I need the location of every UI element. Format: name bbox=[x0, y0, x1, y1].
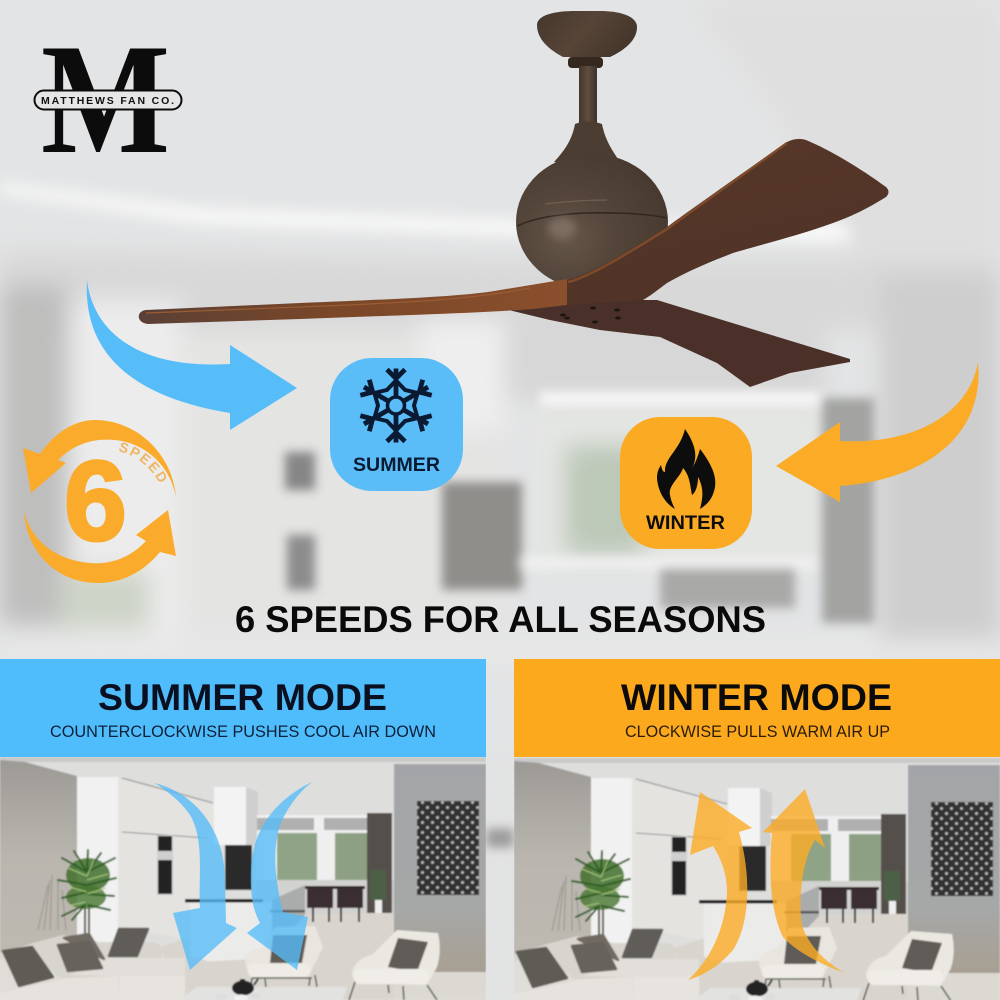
text: winter mode description: CLOCKWISE PULLS WARM AIR UP bbox=[625, 722, 890, 741]
icon: six speed arrows: 6 bbox=[64, 438, 127, 564]
ceiling fan bbox=[139, 11, 889, 387]
icon: six speed arrows: SPEED bbox=[119, 442, 166, 482]
text: summer mode description: COUNTERCLOCKWISE PUSHES COOL AIR DOWN bbox=[50, 722, 436, 741]
fan canopy and downrod bbox=[537, 11, 637, 124]
arrow: cool air right bbox=[247, 782, 312, 970]
icon: six speed arrows bbox=[23, 380, 214, 583]
title: 6 SPEEDS FOR ALL SEASONS bbox=[235, 599, 766, 640]
arrow: warm air right bbox=[763, 789, 845, 973]
label: winter: WINTER bbox=[646, 513, 725, 534]
panel: summer room with downward airflow bbox=[0, 757, 486, 1000]
heading: summer mode: SUMMER MODE bbox=[98, 677, 387, 718]
arrow: cool air left bbox=[155, 783, 237, 970]
label: summer: SUMMER bbox=[353, 455, 440, 476]
logo: Matthews Fan Co.: M bbox=[41, 12, 170, 187]
badge: summer bbox=[330, 358, 463, 491]
fan hub screws bbox=[560, 306, 621, 324]
fan blade: upper right bbox=[567, 139, 888, 305]
arrow: winter airflow bbox=[776, 362, 979, 502]
icon: flame bbox=[657, 429, 715, 509]
panel: winter room with upward airflow bbox=[514, 758, 1000, 1000]
fan blade edge highlight bbox=[568, 143, 787, 282]
arrow: summer airflow bbox=[87, 280, 297, 430]
fan blade: long left bbox=[139, 279, 567, 324]
icon: snowflake bbox=[359, 368, 433, 442]
panel: winter mode header bbox=[514, 659, 1000, 757]
fan blade: bottom right and underside bbox=[500, 300, 850, 387]
panel: summer mode header bbox=[0, 659, 486, 757]
fan motor housing bbox=[516, 122, 668, 290]
heading: winter mode: WINTER MODE bbox=[621, 677, 892, 718]
logo: Matthews Fan Co.: MATTHEWS FAN CO. bbox=[41, 95, 174, 107]
badge: winter bbox=[620, 417, 752, 549]
arrow: warm air left bbox=[688, 792, 752, 980]
